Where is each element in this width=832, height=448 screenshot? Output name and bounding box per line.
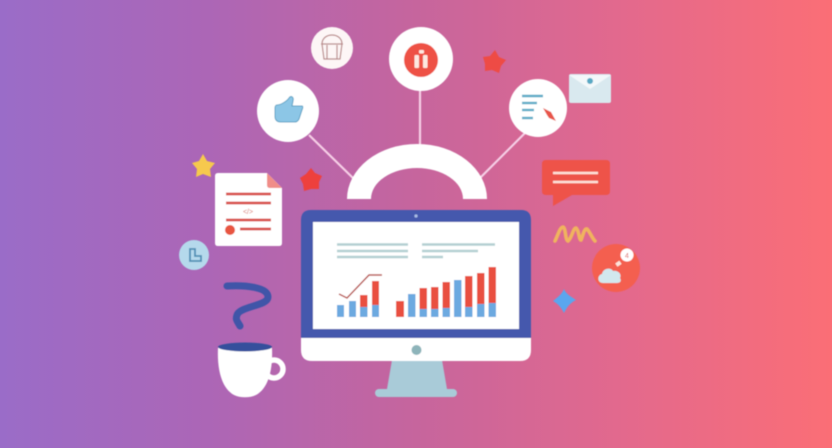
icon: cloud link red circle (592, 244, 640, 292)
icon: blue sparkle (553, 289, 576, 313)
squiggle: yellow scribble (555, 227, 595, 241)
connector lines (309, 90, 525, 179)
document card: </> (243, 209, 253, 216)
icon: centre red badge circle (389, 27, 453, 91)
monitor bezel (301, 210, 531, 338)
monitor chin (301, 330, 531, 361)
squiggle: steam (227, 286, 268, 326)
icon: red star top (483, 50, 506, 73)
monitor (301, 210, 531, 397)
icon: small cupcake circle (311, 27, 353, 69)
icon: small blue chart circle (179, 240, 209, 270)
document card (215, 173, 282, 246)
icon: yellow star (192, 154, 215, 177)
large bar chart (396, 267, 496, 317)
icon: cloud link red circle: 4 (625, 253, 629, 260)
icon: document and pointer circle (509, 79, 567, 137)
icon: red chat bubble (542, 160, 610, 206)
text lines on screen (337, 244, 495, 257)
icon: coffee cup (218, 342, 283, 397)
monitor stand (375, 360, 457, 397)
white arch hub (347, 144, 487, 199)
screen (313, 222, 519, 329)
icon: red star left (300, 168, 322, 191)
icon: envelope (569, 74, 611, 103)
small bar chart with trend line (337, 275, 382, 317)
icon: thumbs up circle (257, 80, 319, 142)
